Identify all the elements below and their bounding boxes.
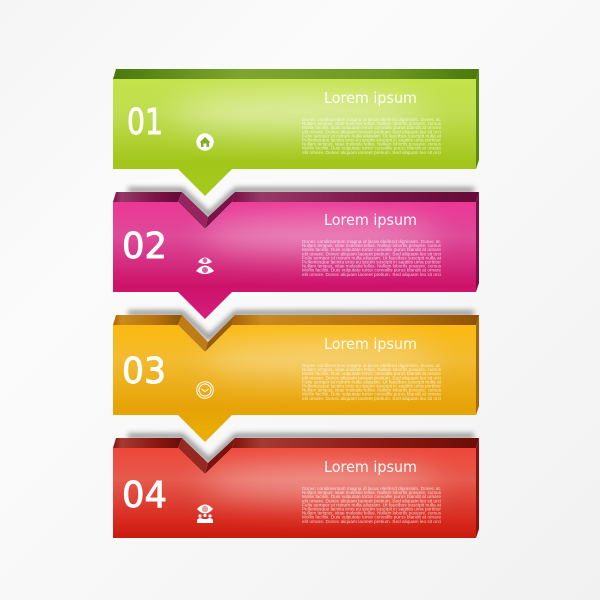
body text: Nullam tempus, vitae molestie tellus. Nullam lobortis posuere, cursus — [302, 243, 441, 248]
body text: Mollis facilisi. Duis vulputate tortor convallis purus blandit at ornare — [302, 268, 442, 273]
body text: Mollis facilisi. Duis vulputate tortor convallis purus blandit at ornare — [302, 125, 442, 130]
body text — [302, 363, 442, 401]
body text: Mollis facilisi. Duis vulputate tortor convallis purus blandit at ornare — [302, 146, 442, 151]
body text: Donec condimentum magna id lacus eleifend dignissim. Donec at. — [302, 363, 441, 368]
heading: Lorem ipsum — [324, 458, 417, 476]
body text: Pellentesque lacinia eros eu ipsum suscipit in sagittis urna porttitor — [302, 260, 442, 264]
body text: Nullam tempus, vitae molestie tellus. Nullam lobortis posuere, cursus — [302, 142, 441, 147]
body text — [302, 486, 442, 524]
body text: Nullam tempus, vitae molestie tellus. Nullam lobortis posuere, cursus — [302, 511, 441, 516]
body text: elit ornare. Donec aliquam laoreet pretium. Sed aliquam leo sit orci — [302, 396, 441, 401]
body text: Donec condimentum magna id lacus eleifend dignissim. Donec at. — [302, 239, 441, 244]
body text: Felis semper ut rutrum nulla aliquam. Ut faucibus suscipit nulla at — [302, 502, 442, 507]
heading: Lorem ipsum — [324, 211, 417, 229]
panel: 03 orange — [113, 313, 482, 442]
icon: clock — [197, 382, 213, 398]
body text: elit ornare. Donec aliquam laoreet pretium. Sed aliquam leo sit orci — [302, 498, 441, 503]
number 02: 02 — [122, 226, 167, 267]
body text — [302, 239, 442, 277]
body text: Felis semper ut rutrum nulla aliquam. Ut faucibus suscipit nulla at — [302, 379, 442, 384]
panel: 04 red — [113, 436, 482, 538]
body text — [302, 117, 442, 155]
body text: Pellentesque lacinia eros eu ipsum suscipit in sagittis urna porttitor — [302, 384, 442, 388]
body text: Felis semper ut rutrum nulla aliquam. Ut faucibus suscipit nulla at — [302, 133, 442, 138]
body text: Mollis facilisi. Duis vulputate tortor convallis purus blandit at ornare — [302, 371, 442, 376]
body text: Mollis facilisi. Duis vulputate tortor convallis purus blandit at ornare — [302, 392, 442, 397]
body text: Nullam tempus, vitae molestie tellus. Nullam lobortis posuere, cursus — [302, 264, 441, 269]
icon: home — [196, 133, 214, 151]
body text: Mollis facilisi. Duis vulputate tortor convallis purus blandit at ornare — [302, 515, 442, 520]
panel: 02 pink — [113, 190, 482, 319]
icon: two eyes — [196, 258, 214, 274]
body text: Nullam tempus, vitae molestie tellus. Nullam lobortis posuere, cursus — [302, 388, 441, 393]
body text: elit ornare. Donec aliquam laoreet pretium. Sed aliquam leo sit orci — [302, 272, 441, 277]
body text: elit ornare. Donec aliquam laoreet pretium. Sed aliquam leo sit orci — [302, 129, 441, 134]
body text: Mollis facilisi. Duis vulputate tortor convallis purus blandit at ornare — [302, 247, 442, 252]
panel: 01 green — [113, 67, 482, 196]
body text: Nullam tempus, vitae molestie tellus. Nullam lobortis posuere, cursus — [302, 121, 441, 126]
body text: elit ornare. Donec aliquam laoreet pretium. Sed aliquam leo sit orci — [302, 375, 441, 380]
body text: elit ornare. Donec aliquam laoreet pretium. Sed aliquam leo sit orci — [302, 150, 441, 155]
number 01: 01 — [127, 102, 163, 143]
heading: Lorem ipsum — [324, 335, 417, 353]
heading: Lorem ipsum — [324, 89, 417, 107]
body text: elit ornare. Donec aliquam laoreet pretium. Sed aliquam leo sit orci — [302, 519, 441, 524]
icon: eye over people — [197, 504, 213, 523]
body text: Donec condimentum magna id lacus eleifend dignissim. Donec at. — [302, 486, 441, 491]
body text: Mollis facilisi. Duis vulputate tortor convallis purus blandit at ornare — [302, 494, 442, 499]
body text: Nullam tempus, vitae molestie tellus. Nullam lobortis posuere, cursus — [302, 367, 441, 372]
number 04: 04 — [122, 475, 167, 516]
body text: Felis semper ut rutrum nulla aliquam. Ut faucibus suscipit nulla at — [302, 255, 442, 260]
body text: Pellentesque lacinia eros eu ipsum suscipit in sagittis urna porttitor — [302, 138, 442, 142]
number 03: 03 — [122, 351, 166, 392]
body text: Nullam tempus, vitae molestie tellus. Nullam lobortis posuere, cursus — [302, 490, 441, 495]
body text: elit ornare. Donec aliquam laoreet pretium. Sed aliquam leo sit orci — [302, 251, 441, 256]
body text: Donec condimentum magna id lacus eleifend dignissim. Donec at. — [302, 117, 441, 122]
body text: Pellentesque lacinia eros eu ipsum suscipit in sagittis urna porttitor — [302, 506, 442, 512]
